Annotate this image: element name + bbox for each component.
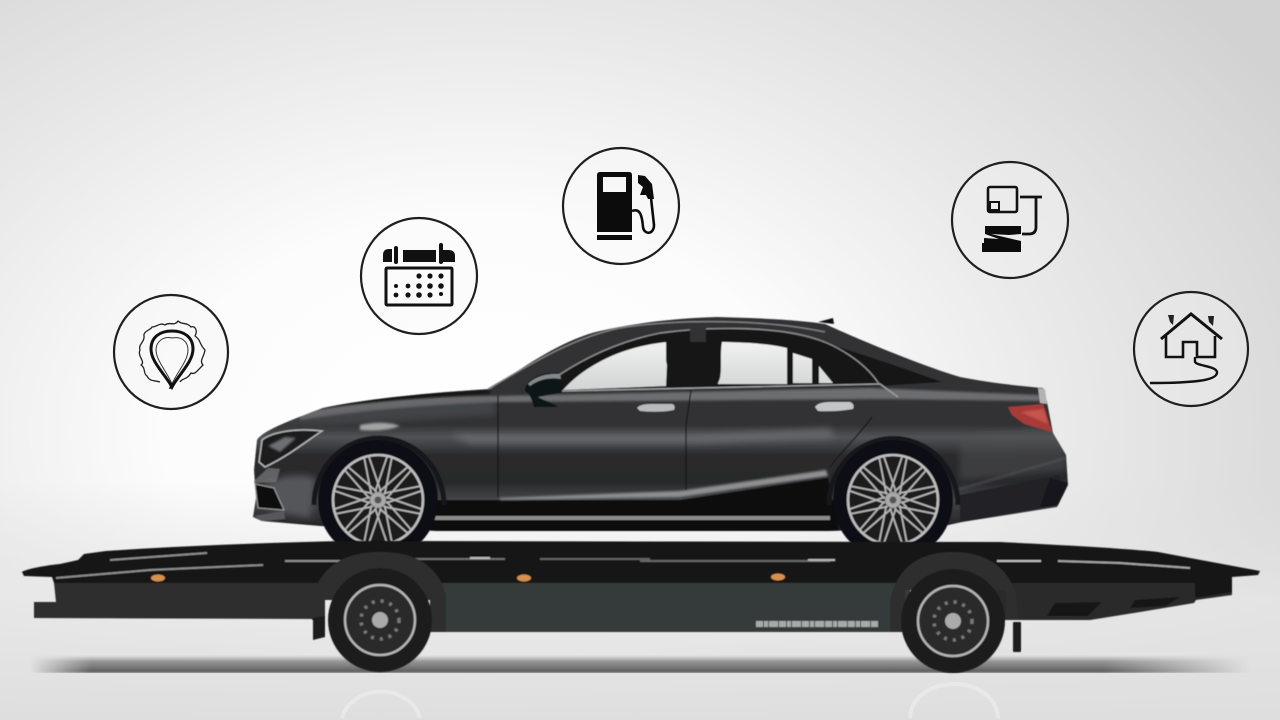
chassis centre section: [430, 583, 910, 632]
rear wheel: [829, 438, 958, 560]
flatbed trailer: [22, 541, 1260, 673]
antenna: [818, 318, 834, 324]
icon: fuel pump: [563, 148, 679, 264]
left fender and wheel: [312, 552, 446, 672]
belt line: [562, 384, 898, 397]
ground shadow: [30, 655, 1250, 673]
front grille and intake: [254, 468, 280, 483]
door seams: [498, 390, 872, 497]
side mirror: [525, 373, 563, 407]
deck: [22, 541, 1260, 598]
window glass: [563, 342, 833, 390]
icon: document and road: [952, 162, 1068, 278]
icon: location pin: [114, 295, 228, 409]
front wheel: [314, 438, 444, 560]
roof chrome: [488, 322, 825, 389]
door handles: [637, 404, 675, 412]
chassis left section: [34, 583, 320, 619]
icon: house with path: [1134, 292, 1248, 406]
body highlights and lower panel: [262, 388, 1068, 535]
window frame: [540, 329, 942, 392]
chassis right section: [990, 583, 1232, 620]
right fender and wheel: [890, 552, 1021, 673]
tail light: [1008, 404, 1052, 432]
car: [253, 317, 1068, 560]
side lettering mark: [756, 621, 878, 627]
icon: calendar: [361, 218, 477, 334]
car body: [253, 317, 1068, 531]
headlight: [259, 430, 322, 467]
amber marker lights: [151, 574, 785, 582]
seat headrest: [666, 342, 722, 386]
deck rails: [56, 553, 1190, 578]
faint wheel reflections: [342, 684, 998, 718]
